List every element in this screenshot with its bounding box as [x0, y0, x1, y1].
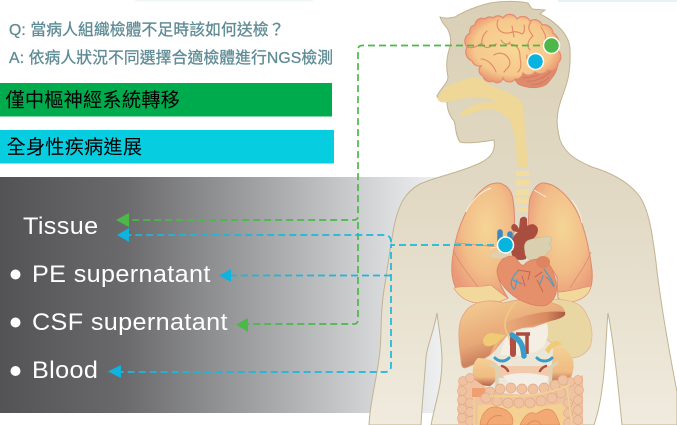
blue dashed connector: lung to tissue, PE and blood — [118, 235, 505, 372]
heart — [490, 217, 557, 306]
colon and small intestine — [458, 374, 584, 425]
top edge tint — [135, 0, 677, 2]
liver and stomach — [459, 299, 592, 368]
legend: systemic progression: 全身性疾病進展 — [6, 136, 142, 158]
question and answer text: Q: 當病人組織檢體不足時該如何送檢？ — [9, 21, 285, 39]
brain — [465, 14, 561, 88]
marker: blue brain dot — [528, 54, 544, 70]
question and answer text — [9, 21, 333, 67]
body silhouette — [369, 2, 677, 425]
blue arrowheads — [108, 228, 231, 378]
specimen label: Tissue: Tissue — [23, 214, 98, 240]
marker: blue lung dot — [498, 237, 514, 253]
legend: CNS-only metastasis: 僅中樞神經系統轉移 — [6, 90, 180, 112]
abdominal vessels — [512, 334, 530, 356]
human body illustration — [369, 2, 677, 425]
green dashed connector: brain to tissue and CSF — [126, 46, 551, 324]
legend: systemic progression — [0, 130, 334, 164]
legend: CNS-only metastasis — [0, 83, 332, 116]
kidneys — [473, 341, 574, 390]
specimen label: Blood: Blood — [32, 358, 98, 384]
airway and trachea — [438, 77, 529, 212]
question and answer text: A: 依病人狀況不同選擇合適檢體進行NGS檢測 — [9, 49, 333, 67]
specimen label: CSF supernatant: CSF supernatant — [32, 310, 228, 336]
marker: green brain dot — [544, 38, 560, 54]
lungs — [452, 183, 592, 303]
green arrowheads — [116, 213, 248, 332]
specimen label: PE supernatant: PE supernatant — [32, 262, 211, 288]
gray specimen panel background — [0, 177, 445, 413]
